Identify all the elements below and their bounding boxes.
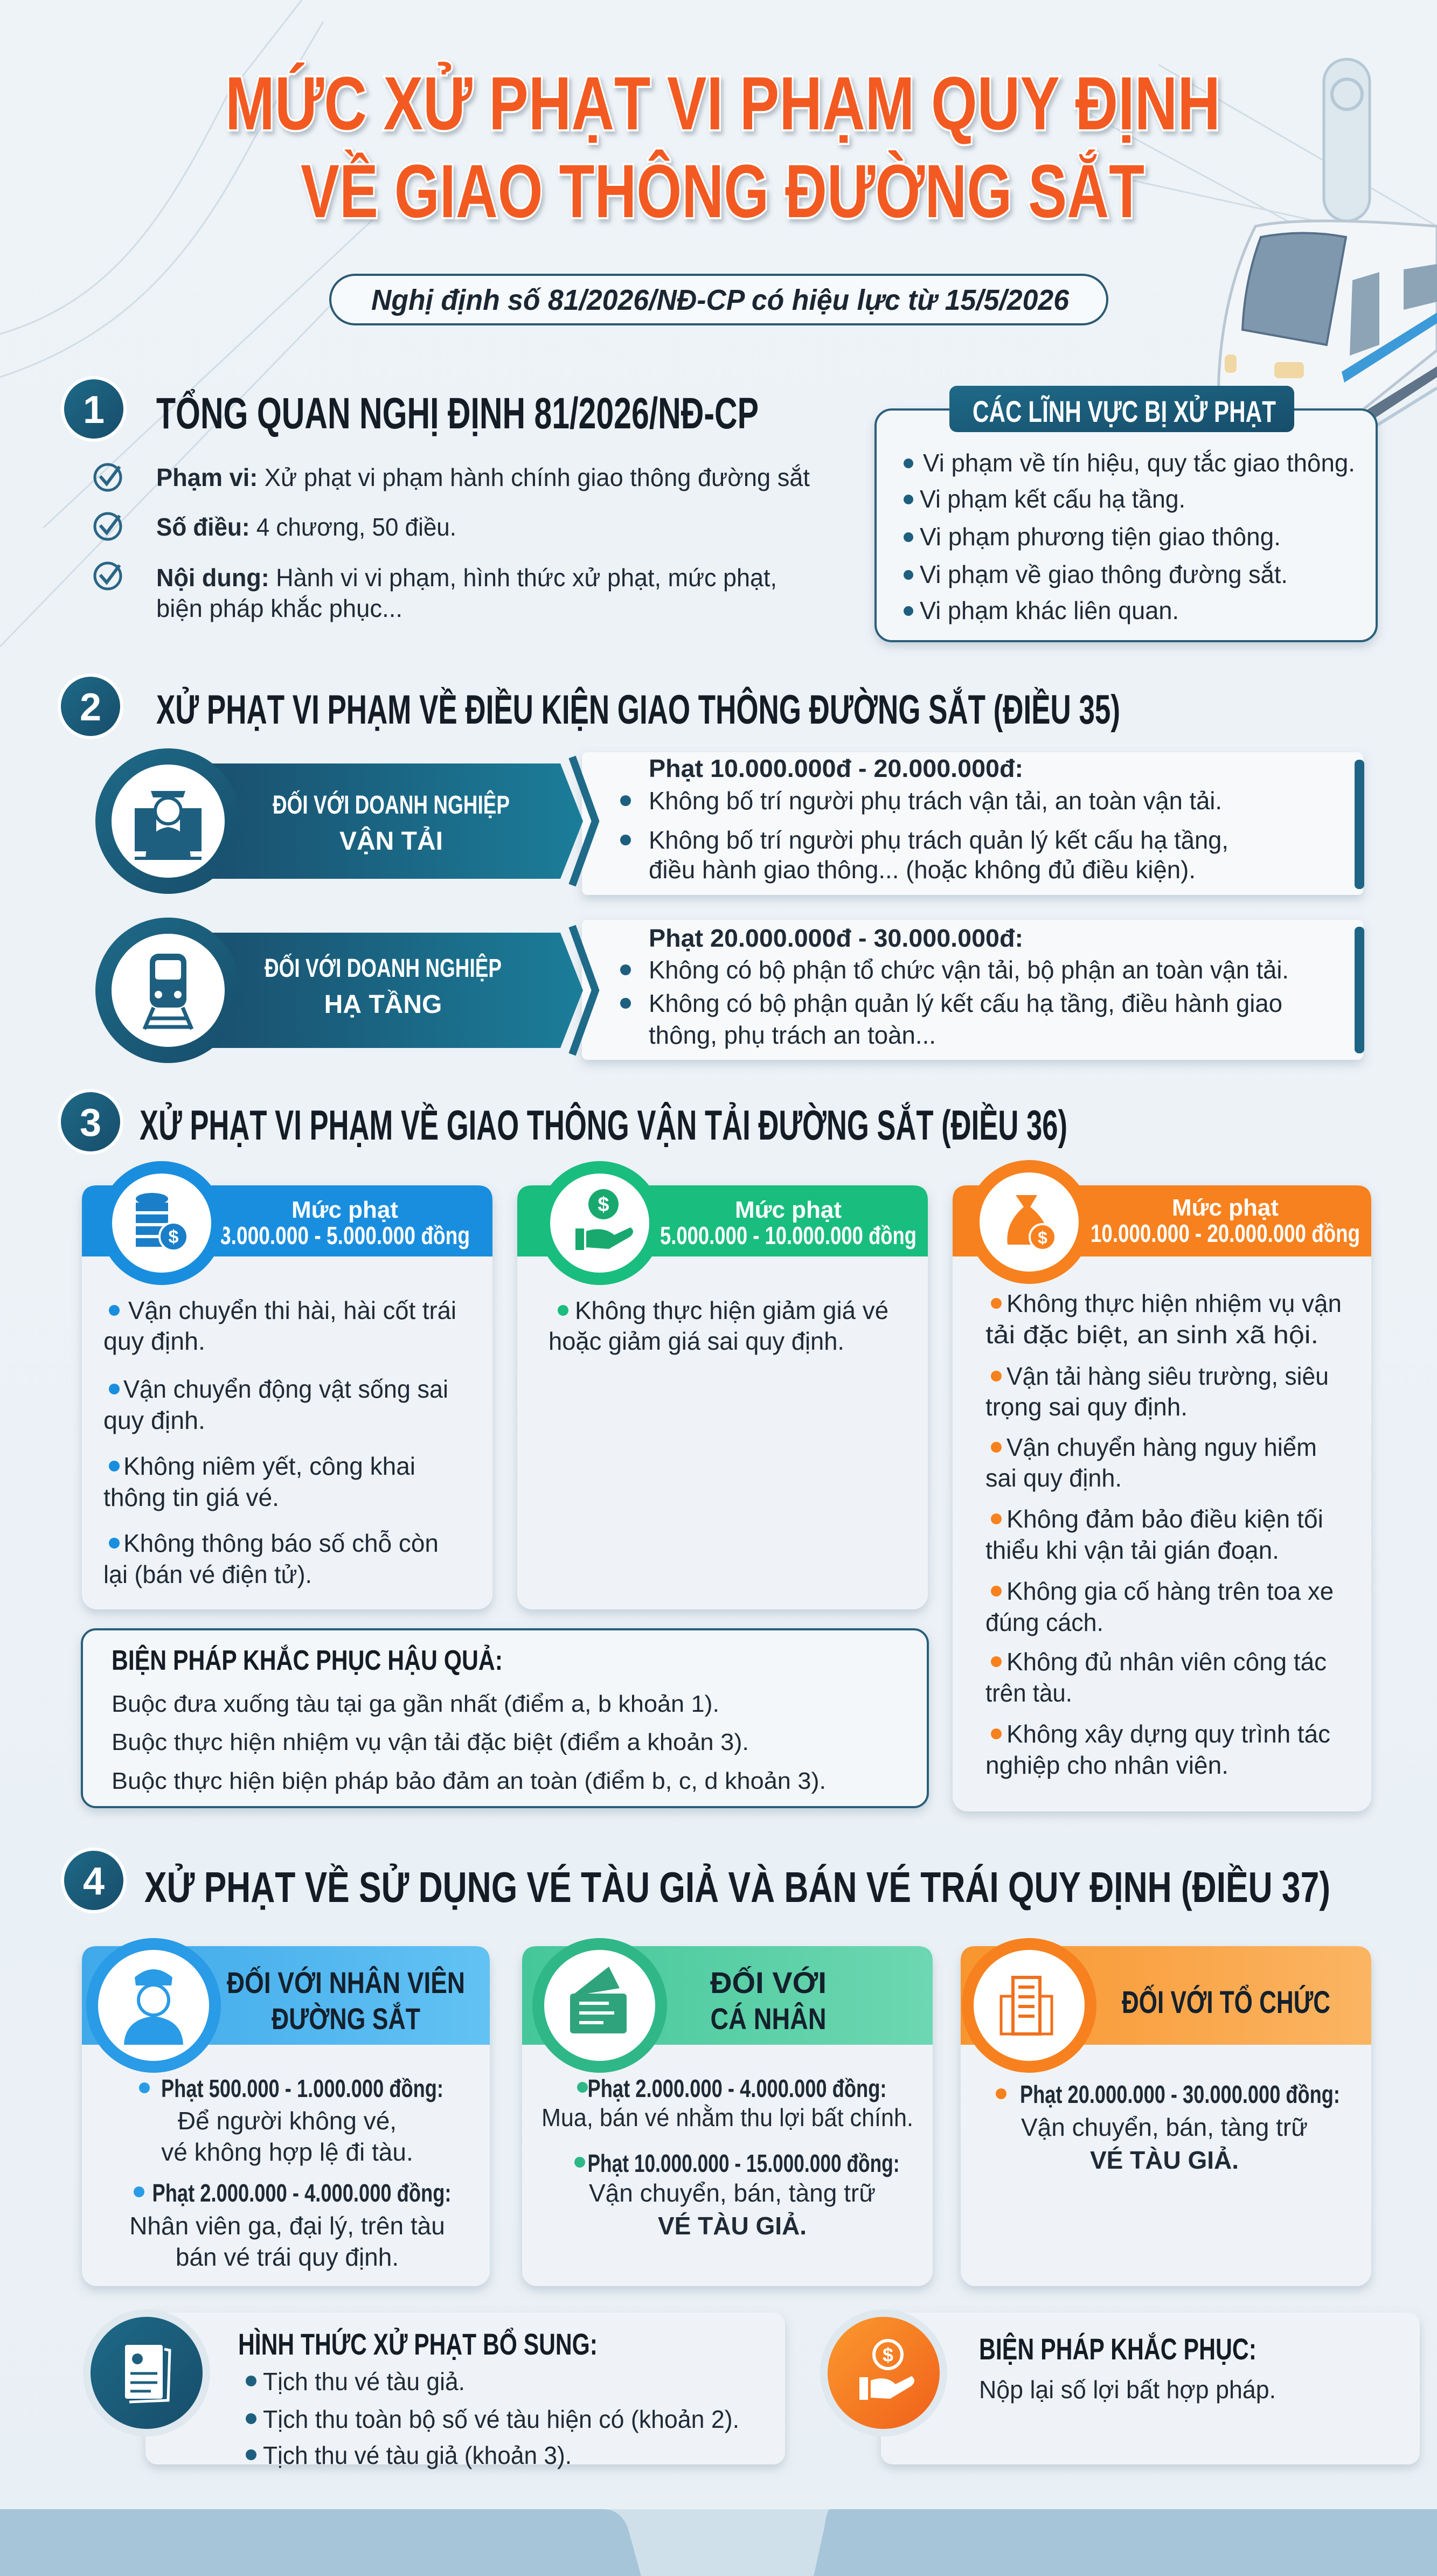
icon: money bag [967,1160,1091,1284]
card: muc phat 5-10 trieu: Không thực hiện giảm giá vé [575,1296,888,1324]
card: nhan vien duong sat: vé không hợp lệ đi tàu. [161,2138,413,2166]
card: muc phat 3-5 trieu: 3.000.000 - 5.000.000 đồng [220,1221,470,1249]
section 3 number badge [59,1091,122,1153]
card: ca nhan [522,1938,933,2286]
card: muc phat 10-20 trieu: Không đủ nhân viên công tác [1006,1648,1327,1676]
card: muc phat 3-5 trieu: quy định. [103,1327,205,1355]
ribbon label [199,757,595,885]
card: muc phat 3-5 trieu: lại (bán vé điện tử). [103,1560,312,1588]
icon: tickets [532,1938,667,2073]
card: muc phat 5-10 trieu: hoặc giảm giá sai quy định. [549,1327,844,1355]
section 4 number badge [63,1849,125,1912]
title [225,61,1220,233]
icon: coins: $ [169,1227,179,1247]
card: ha tang fines: Phạt 20.000.000đ - 30.000.000đ: [649,924,1023,952]
card: van tai fines: Không bố trí người phụ trách vận tải, an toàn vận tải. [649,787,1222,815]
panel: bien phap khac phuc: Nộp lại số lợi bất hợp pháp. [979,2376,1276,2404]
card: muc phat 10-20 trieu: Không xây dựng quy trình tác [1006,1720,1330,1748]
icon: documents [83,2309,210,2436]
row: doanh nghiep ha tang [95,918,1364,1063]
title: VỀ GIAO THÔNG ĐƯỜNG SẮT [301,149,1144,233]
section 2 number badge [59,675,122,738]
card: van tai fines: Không bố trí người phụ trách quản lý kết cấu hạ tầng, [649,826,1228,854]
card: to chuc: Phạt 20.000.000 - 30.000.000 đồng: [1020,2080,1340,2108]
card: to chuc: ĐỐI VỚI TỔ CHỨC [1122,1985,1330,2020]
icon: train front [95,918,241,1063]
check item: noi dung [95,563,777,622]
card: ca nhan: Phạt 2.000.000 - 4.000.000 đồng: [587,2074,887,2102]
check item: noi dung: Nội dung: Hành vi vi phạm, hình thức xử phạt, mức phạt, [156,564,777,592]
card: muc phat 3-5 trieu [82,1161,492,1609]
card: nhan vien duong sat: ĐƯỜNG SẮT [272,2002,420,2036]
panel: hinh thuc xu phat bo sung: Tịch thu vé tàu giả. [263,2367,465,2396]
card: muc phat 10-20 trieu: trên tàu. [985,1679,1072,1707]
card: muc phat 10-20 trieu: Không đảm bảo điều kiện tối [1006,1505,1323,1533]
section 3 number badge: 3 [80,1101,101,1144]
card: muc phat 5-10 trieu [517,1161,928,1609]
card: muc phat 3-5 trieu: thông tin giá vé. [103,1483,279,1511]
icon: hand with coin [538,1161,662,1285]
card: muc phat 10-20 trieu: trọng sai quy định. [985,1393,1188,1421]
card: nhan vien duong sat: Phạt 500.000 - 1.000.000 đồng: [161,2074,443,2102]
panel: hinh thuc xu phat bo sung [83,2309,785,2469]
card: nhan vien duong sat: Phạt 2.000.000 - 4.000.000 đồng: [152,2179,452,2207]
card: muc phat 10-20 trieu: thiểu khi vận tải gián đoạn. [985,1536,1279,1564]
icon: hand with coin: $ [598,1193,609,1216]
icon: hand with coin [820,2309,947,2436]
card: van tai fines [582,752,1364,895]
card: muc phat 5-10 trieu: 5.000.000 - 10.000.000 đồng [660,1221,917,1249]
card: nhan vien duong sat: ĐỐI VỚI NHÂN VIÊN [227,1966,465,1999]
card: muc phat 3-5 trieu: quy định. [103,1406,205,1434]
illustration: train [1105,59,1437,544]
card: ca nhan: Mua, bán vé nhằm thu lợi bất chính. [542,2103,913,2131]
ribbon label: ĐỐI VỚI DOANH NGHIỆP [273,790,510,820]
panel: cac linh vuc bi xu phat: Vi phạm phương tiện giao thông. [920,523,1281,551]
card: muc phat 10-20 trieu: Mức phạt [1172,1195,1279,1221]
panel: bien phap khac phuc hau qua: Buộc thực hiện biện pháp bảo đảm an toàn (điểm b, c, d khoản 3). [112,1768,826,1794]
ribbon label: HẠ TẦNG [324,990,442,1019]
icon: building [962,1938,1096,2073]
card: muc phat 3-5 trieu: Mức phạt [291,1197,398,1223]
panel: bien phap khac phuc hau qua: BIỆN PHÁP KHẮC PHỤC HẬU QUẢ: [112,1644,503,1676]
card: van tai fines: Phạt 10.000.000đ - 20.000.000đ: [649,754,1023,782]
check item: so dieu: Số điều: 4 chương, 50 điều. [156,513,456,541]
card: muc phat 3-5 trieu: Vận chuyển thi hài, hài cốt trái [128,1296,456,1324]
card: nhan vien duong sat: Nhân viên ga, đại lý, trên tàu [129,2212,445,2240]
ribbon label: ĐỐI VỚI DOANH NGHIỆP [265,953,502,983]
card: ca nhan: Phạt 10.000.000 - 15.000.000 đồng: [587,2149,900,2177]
card: muc phat 10-20 trieu [953,1160,1371,1811]
section 1 number badge [63,378,125,440]
panel: cac linh vuc bi xu phat: Vi phạm khác liên quan. [920,596,1179,624]
card: ha tang fines: Không có bộ phận tổ chức vận tải, bộ phận an toàn vận tải. [649,956,1289,984]
card: muc phat 10-20 trieu: sai quy định. [985,1464,1122,1492]
card: to chuc [961,1938,1371,2286]
card: ca nhan: Vận chuyển, bán, tàng trữ [589,2179,876,2207]
panel: bien phap khac phuc hau qua: Buộc thực hiện nhiệm vụ vận tải đặc biệt (điểm a khoản 3). [112,1729,749,1755]
panel: cac linh vuc bi xu phat: Vi phạm về giao thông đường sắt. [920,560,1288,588]
card: muc phat 10-20 trieu: tải đặc biệt, an sinh xã hội. [985,1321,1318,1349]
card: muc phat 10-20 trieu: 10.000.000 - 20.000.000 đồng [1091,1219,1360,1247]
panel: bien phap khac phuc hau qua [82,1629,928,1807]
icon: hand with coin: $ [883,2344,893,2366]
icon: conductor [95,748,241,894]
subtitle pill [330,275,1107,324]
panel: hinh thuc xu phat bo sung: HÌNH THỨC XỬ PHẠT BỔ SUNG: [238,2327,598,2361]
section 1 number badge: 1 [83,388,105,432]
card: muc phat 10-20 trieu: Vận chuyển hàng nguy hiểm [1006,1433,1317,1461]
row: doanh nghiep van tai [95,748,1364,895]
icon: coins [100,1161,224,1285]
card: nhan vien duong sat: bán vé trái quy định. [176,2243,399,2271]
card: ca nhan: ĐỐI VỚI [710,1966,827,1999]
ribbon label [199,926,595,1054]
card: muc phat 5-10 trieu: Mức phạt [735,1197,842,1223]
card: muc phat 10-20 trieu: Không thực hiện nhiệm vụ vận [1006,1289,1342,1317]
panel: cac linh vuc bi xu phat: Vi phạm về tín hiệu, quy tắc giao thông. [923,449,1355,477]
card: muc phat 10-20 trieu: Vận tải hàng siêu trường, siêu [1006,1362,1329,1390]
card: nhan vien duong sat [82,1938,490,2286]
check item: pham vi: Phạm vi: Xử phạt vi phạm hành chính giao thông đường sắt [156,463,810,491]
check item: noi dung: biện pháp khắc phục... [156,594,402,622]
icon: railway staff [86,1938,221,2073]
card: muc phat 3-5 trieu: Không niêm yết, công khai [123,1452,415,1480]
section 2 number badge: 2 [80,686,101,729]
card: van tai fines: điều hành giao thông... (hoặc không đủ điều kiện). [649,856,1196,884]
panel: bien phap khac phuc [820,2309,1420,2464]
subtitle pill: Nghị định số 81/2026/NĐ-CP có hiệu lực từ 15/5/2026 [371,284,1070,316]
section 1 checklist [95,463,810,622]
card: ha tang fines: thông, phụ trách an toàn... [649,1021,936,1049]
card: muc phat 10-20 trieu: nghiệp cho nhân viên. [985,1751,1228,1779]
panel: hinh thuc xu phat bo sung: Tịch thu vé tàu giả (khoản 3). [263,2441,572,2469]
card: muc phat 10-20 trieu: Không gia cố hàng trên toa xe [1006,1577,1334,1605]
ribbon label: VẬN TẢI [339,826,443,856]
card: ha tang fines [582,920,1364,1060]
panel: bien phap khac phuc: BIỆN PHÁP KHẮC PHỤC: [979,2332,1256,2366]
card: to chuc: VÉ TÀU GIẢ. [1090,2146,1239,2174]
section 4 number badge: 4 [83,1860,105,1903]
icon: money bag: $ [1038,1228,1047,1247]
card: muc phat 3-5 trieu: Không thông báo số chỗ còn [123,1529,439,1557]
panel: cac linh vuc bi xu phat [876,386,1377,641]
card: ha tang fines: Không có bộ phận quản lý kết cấu hạ tầng, điều hành giao [649,989,1282,1017]
panel: bien phap khac phuc hau qua: Buộc đưa xuống tàu tại ga gần nhất (điểm a, b khoản 1). [112,1691,719,1717]
card: to chuc: Vận chuyển, bán, tàng trữ [1021,2113,1308,2141]
tab heading [949,386,1294,432]
panel: hinh thuc xu phat bo sung: Tịch thu toàn bộ số vé tàu hiện có (khoản 2). [263,2405,739,2433]
section 1 heading: TỔNG QUAN NGHỊ ĐỊNH 81/2026/NĐ-CP [156,389,759,438]
card: muc phat 10-20 trieu: đúng cách. [985,1608,1103,1636]
card: nhan vien duong sat: Để người không vé, [178,2107,397,2135]
tab heading: CÁC LĨNH VỰC BỊ XỬ PHẠT [973,394,1276,428]
panel: cac linh vuc bi xu phat: Vi phạm kết cấu hạ tầng. [920,485,1185,513]
footer band [0,2509,1437,2576]
card: ca nhan: CÁ NHÂN [710,2002,827,2036]
card: ca nhan: VÉ TÀU GIẢ. [658,2212,807,2240]
card: muc phat 3-5 trieu: Vận chuyển động vật sống sai [123,1375,448,1403]
